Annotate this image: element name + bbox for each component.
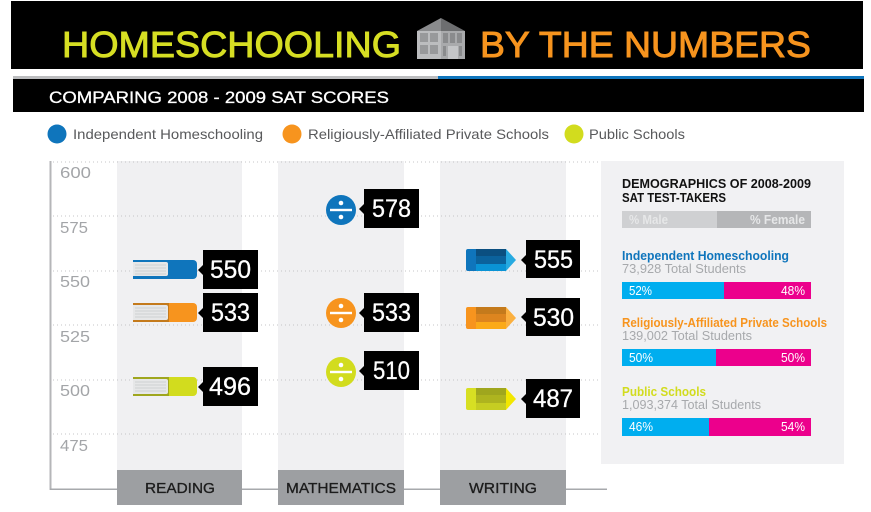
y axis labels [60,165,91,455]
value 530 [521,298,580,336]
chart axes [50,161,607,490]
icon: blue division sign [326,195,356,225]
icon: orange book [133,303,197,322]
value 510: 510 [373,357,410,385]
value 533 mathematics [359,293,419,332]
group: public schools: Public Schools [622,385,706,399]
value 533 reading: 533 [211,299,250,327]
group: independent homeschooling: 73,928 Total Students [622,262,746,276]
group: public schools: 1,093,374 Total Students [622,398,761,412]
y axis labels: 475 [60,438,88,455]
group: religiously-affiliated private schools: 50% [781,350,805,365]
title: by the numbers: BY THE NUMBERS [480,24,811,65]
icon: blue pencil [466,249,516,271]
group: independent homeschooling: 48% [781,283,805,298]
group: public schools: 54% [781,419,805,434]
icon: lime pencil [466,388,516,410]
group: religiously-affiliated private schools: Religiously-Affiliated Private Schools [622,316,827,330]
title banner [11,1,863,69]
group: religiously-affiliated private schools: 50% [629,350,653,365]
value 555 [521,240,580,278]
category label: mathematics [278,470,404,505]
group: independent homeschooling: 52% [629,283,652,298]
icon: orange pencil [466,307,516,329]
legend [48,124,685,144]
group: independent homeschooling [622,249,811,299]
gender key bar: % Female [750,213,805,227]
y axis labels: 525 [60,329,90,346]
category label: writing: WRITING [469,481,537,497]
legend: Public Schools [589,126,685,142]
value 487 [521,379,580,418]
panel: demographics [601,161,844,464]
title: homeschooling: HOMESCHOOLING [62,24,401,65]
y axis labels: 550 [60,274,90,291]
value 555: 555 [534,246,573,274]
value 550: 550 [210,256,251,284]
section header bar [13,76,864,112]
icon: blue book [133,260,197,279]
value 550 [198,250,258,289]
group: public schools: 46% [629,419,653,434]
category label: mathematics: MATHEMATICS [286,481,396,497]
category label: reading: READING [145,481,215,497]
legend: Religiously-Affiliated Private Schools [308,126,549,142]
gender key bar [622,211,811,228]
icon: school building [417,18,465,59]
group: public schools [622,385,811,436]
value 510 [359,351,419,390]
value 487: 487 [533,385,573,413]
section header bar: COMPARING 2008 - 2009 SAT SCORES [49,88,389,107]
value 578: 578 [372,195,411,223]
value 533 mathematics: 533 [372,299,411,327]
legend: Independent Homeschooling [73,126,263,142]
icon: lime book [133,377,197,396]
gender key bar: % Male [629,213,668,227]
value 496 [198,367,258,406]
group: religiously-affiliated private schools: 139,002 Total Students [622,329,752,343]
icon: orange division sign [326,298,356,328]
icon: lime division sign [326,357,356,387]
panel: demographics: SAT TEST-TAKERS [622,191,726,205]
y axis labels: 600 [60,165,91,182]
category label: writing [440,470,566,505]
panel heading: DEMOGRAPHICS OF 2008-2009 [622,177,811,191]
chart column backgrounds [117,161,566,471]
category label: reading [117,470,242,505]
group: religiously-affiliated private schools [622,316,827,366]
y axis labels: 575 [60,220,88,237]
value 530: 530 [533,304,574,332]
y axis labels: 500 [60,383,90,400]
value 533 reading [198,293,258,332]
value 578 [359,189,419,228]
value 496: 496 [209,373,251,401]
group: independent homeschooling: Independent Homeschooling [622,249,789,263]
